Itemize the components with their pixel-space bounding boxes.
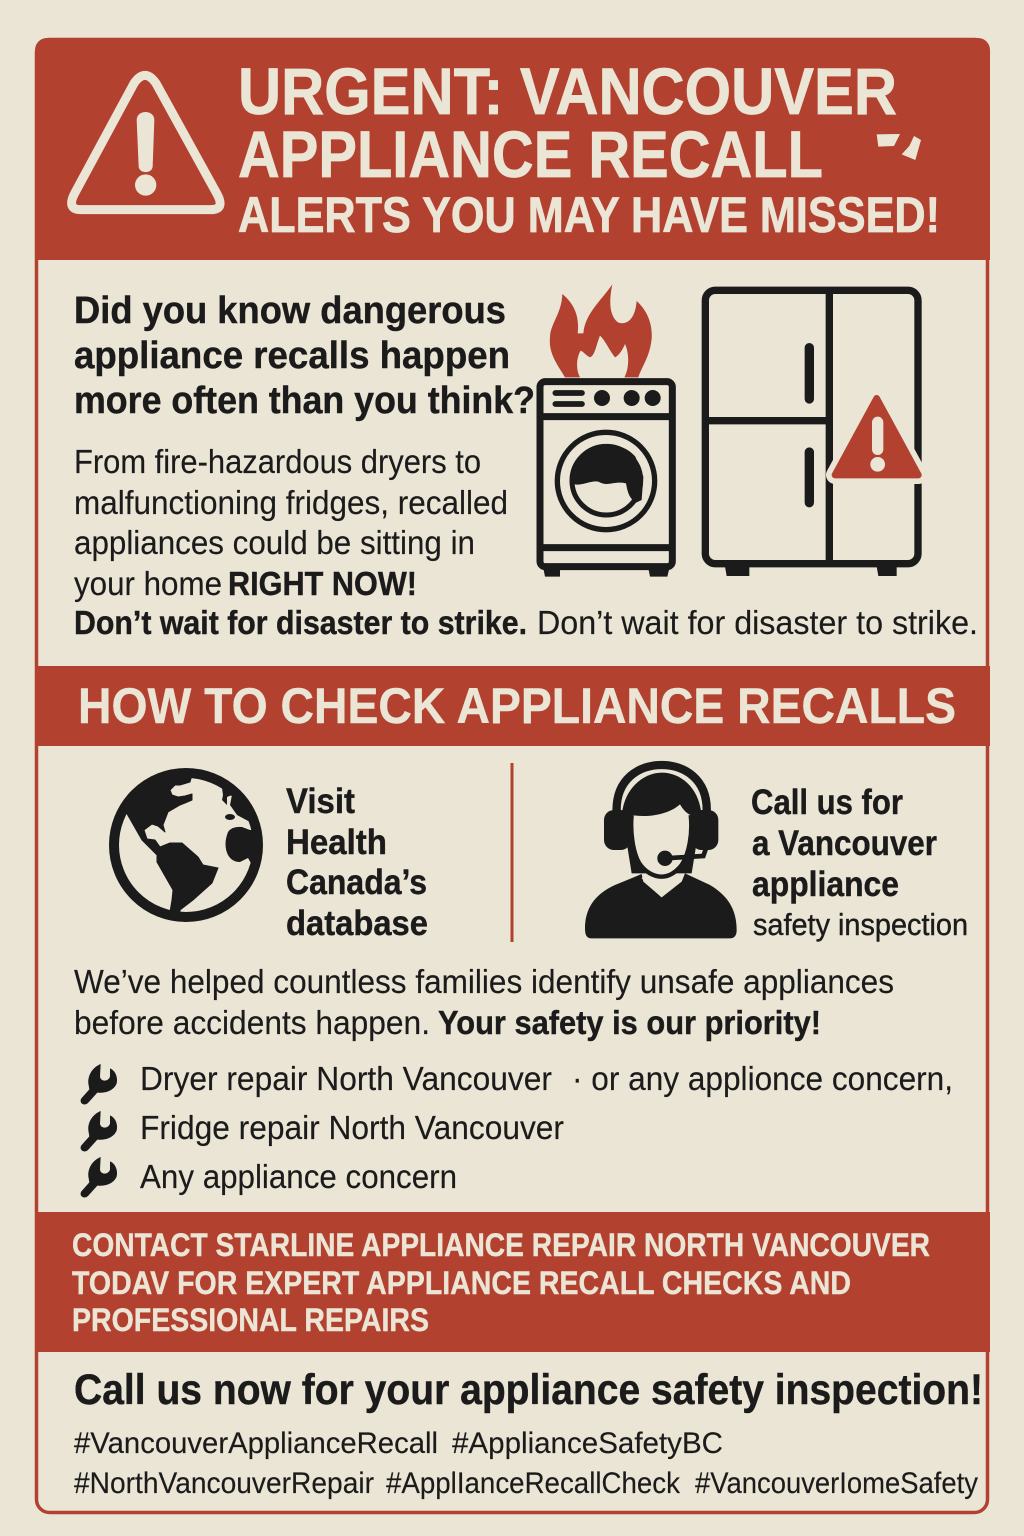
title: APPLIANCE RECALL: [238, 117, 823, 191]
panel: how to check heading: [35, 666, 990, 746]
text block: description: your home: [74, 565, 222, 602]
text: call us: safety inspection: [753, 907, 968, 942]
icon: warning triangle: [72, 75, 220, 210]
text: visit health canada: database: [286, 904, 428, 943]
list text: · or any applionce concern,: [572, 1060, 953, 1097]
text block: families: Your safety is our priority!: [438, 1004, 821, 1041]
heading: did you know: appliance recalls happen: [74, 335, 510, 377]
icon: wrench: [81, 1064, 117, 1104]
hashtags: #ApplIanceRecallCheck: [386, 1467, 681, 1500]
text block: description: malfunctioning fridges, recalled: [74, 484, 508, 521]
icon: fridge with warning: [705, 290, 918, 576]
hashtags: #VancouverApplianceRecall: [74, 1427, 438, 1460]
panel: contact call to action: PROFESSIONAL REPAIRS: [72, 1302, 429, 1338]
text block: description: appliances could be sitting in: [74, 524, 475, 561]
list text: Dryer repair North Vancouver: [140, 1060, 552, 1097]
panel: how to check heading: HOW TO CHECK APPLIANCE RECALLS: [78, 678, 956, 734]
text block: description: RIGHT NOW!: [228, 565, 417, 602]
text: visit health canada: Visit: [286, 782, 355, 821]
text block: families: [74, 963, 894, 1041]
divider: [510, 763, 514, 942]
heading: did you know: [74, 290, 535, 422]
text: call us: Call us for: [751, 783, 903, 822]
hashtags: #VancouverIomeSafety: [695, 1467, 978, 1500]
text block: description: [74, 443, 978, 641]
list text: [140, 1060, 953, 1195]
text block: description: Don’t wait for disaster to strike.: [74, 604, 527, 641]
list text: Any appliance concern: [140, 1158, 457, 1195]
text: visit health canada: Canada’s: [286, 863, 427, 902]
panel: contact call to action: CONTACT STARLINE APPLIANCE REPAIR NORTH VANCOUVER: [72, 1227, 930, 1263]
hashtags: #NorthVancouverRepair: [74, 1467, 374, 1500]
text: call us: [751, 783, 968, 942]
panel: did you know: [74, 284, 978, 641]
title: URGENT: VANCOUVER: [238, 54, 897, 128]
heading: did you know: Did you know dangerous: [74, 290, 506, 332]
text: visit health canada: [286, 782, 428, 943]
icon: flame: [550, 284, 652, 377]
icon: headset agent: [585, 765, 737, 938]
icon: wrench: [81, 1111, 117, 1151]
hashtags: #ApplianceSafetyBC: [452, 1427, 723, 1460]
panel: header: [35, 38, 990, 260]
text block: description: From fire-hazardous dryers to: [74, 443, 481, 480]
text block: description: Don’t wait for disaster to strike.: [537, 604, 978, 641]
list: services: [81, 1060, 953, 1197]
stray marks: [877, 134, 921, 160]
heading: did you know: more often than you think?: [74, 380, 535, 422]
text: call us: a Vancouver: [752, 824, 937, 863]
hashtags: [74, 1427, 978, 1500]
text block: families: before accidents happen.: [74, 1004, 430, 1041]
list text: Fridge repair North Vancouver: [140, 1109, 564, 1146]
title: [238, 54, 940, 243]
text: call us: appliance: [752, 865, 899, 904]
text block: families: We’ve helped countless families identify unsafe appliances: [74, 963, 894, 1000]
icon: washer dryer: [540, 382, 672, 577]
panel: contact call to action: [35, 1212, 990, 1352]
panel: contact call to action: TODAV FOR EXPERT APPLIANCE RECALL CHECKS AND: [72, 1265, 851, 1301]
icon: globe: [109, 768, 263, 922]
text: visit health canada: Health: [286, 823, 387, 862]
icon: wrench: [81, 1157, 117, 1197]
